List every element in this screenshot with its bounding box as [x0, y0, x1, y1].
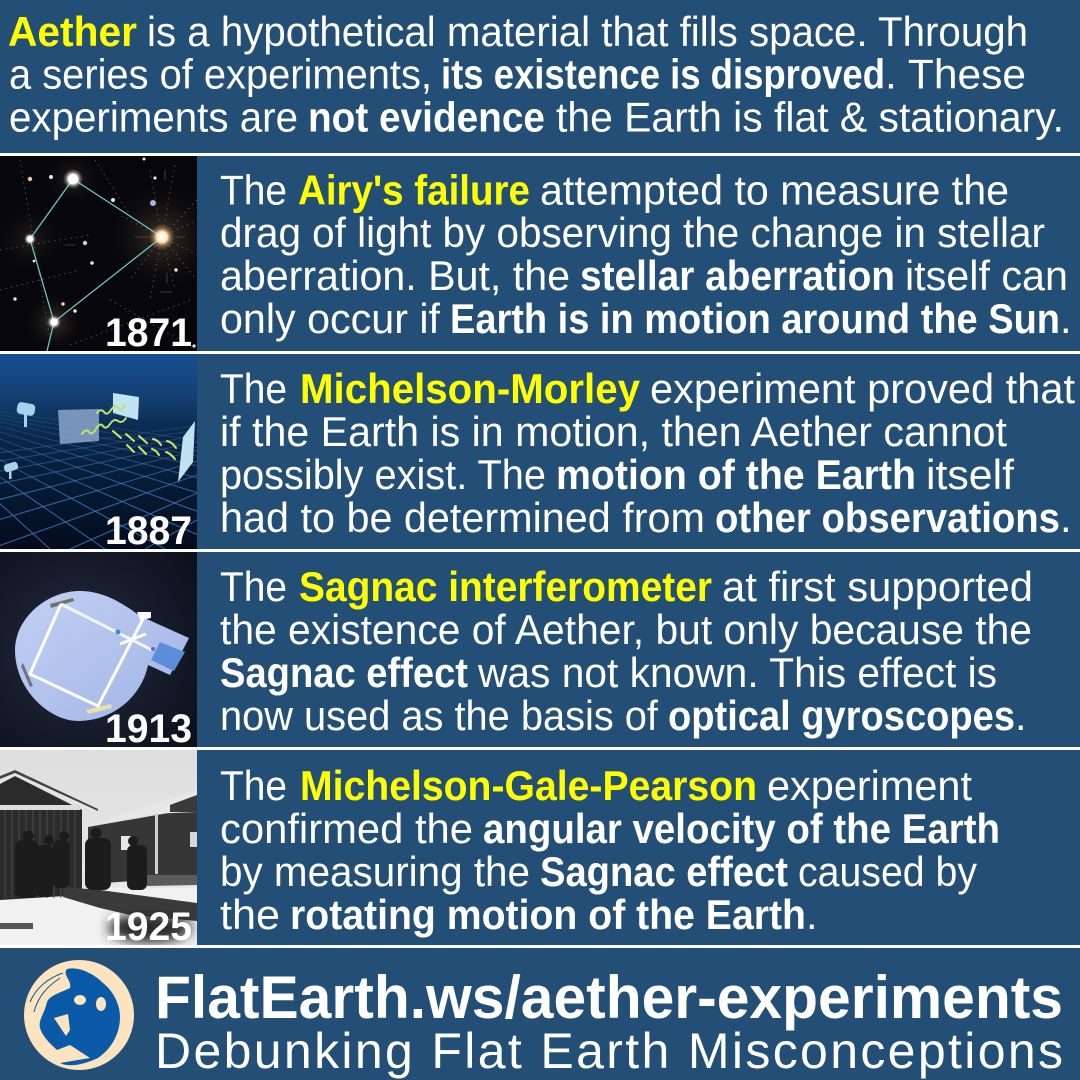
text: Michelson-Morley: .	[1060, 494, 1072, 541]
text: Sagnac interferometer: optical gyroscopes	[668, 692, 1015, 739]
text: Airy's failure: attempted to measure the	[540, 166, 1009, 214]
text: Sagnac interferometer	[220, 563, 1033, 739]
text: Airy's failure: itself can	[905, 252, 1068, 299]
text: Michelson-Gale-Pearson: angular velocity of the Earth	[483, 805, 1000, 852]
year label 1887: 1887	[105, 509, 192, 553]
year label 1871: 1871	[105, 311, 192, 355]
text: Michelson-Gale-Pearson: rotating motion of the Earth	[290, 891, 806, 938]
panel: Sagnac interferometer 1913	[0, 552, 1033, 751]
text: Michelson-Morley: itself	[926, 451, 1014, 498]
image: interferometer on grid	[0, 354, 197, 549]
text: Airy's failure: drag of light by observing the change in stellar	[220, 209, 1045, 256]
text: Sagnac interferometer: at first supported	[722, 563, 1033, 610]
intro text block: not evidence	[308, 94, 545, 140]
image: Sagnac interferometer disc	[0, 552, 197, 747]
panel: Michelson-Morley 1887	[0, 354, 1075, 553]
panel: Airy's failure 1871	[0, 149, 1072, 355]
text: Sagnac interferometer: Sagnac effect	[220, 649, 468, 696]
intro text block: experiments are	[9, 94, 298, 140]
intro text block: . These	[885, 50, 1026, 98]
laser waves	[82, 405, 176, 459]
intro text block: is a hypothetical material that fills space. Through	[147, 8, 1028, 55]
text: Michelson-Morley: The	[220, 365, 287, 412]
panel: Michelson-Gale-Pearson 1925	[0, 750, 1000, 949]
text: Michelson-Morley: if the Earth is in motion, then Aether cannot	[220, 408, 1007, 455]
text: Airy's failure: Airy's failure	[298, 166, 530, 214]
mirror panels	[58, 393, 195, 482]
image: star constellation	[0, 156, 197, 351]
intro text block: its existence is disproved	[441, 50, 885, 98]
light sources	[3, 402, 36, 479]
text: Michelson-Gale-Pearson: by measuring the	[220, 848, 530, 895]
text: Michelson-Gale-Pearson	[220, 762, 1000, 938]
text: Airy's failure: aberration. But, the	[220, 252, 570, 299]
text: Michelson-Morley: other observations	[715, 494, 1060, 541]
text: Michelson-Gale-Pearson: Michelson-Gale-Pearson	[300, 762, 757, 809]
intro text block: a series of experiments,	[9, 50, 432, 98]
text: Michelson-Gale-Pearson: Sagnac effect	[540, 848, 788, 895]
text: Michelson-Gale-Pearson: The	[220, 762, 287, 809]
text: Sagnac interferometer: .	[1015, 692, 1027, 739]
text: Michelson-Morley: possibly exist. The	[220, 451, 546, 498]
text: Airy's failure	[220, 166, 1072, 342]
text: Sagnac interferometer: the existence of Aether, but only because the	[220, 606, 1032, 653]
text: Airy's failure: stellar aberration	[580, 252, 895, 299]
text: Airy's failure: The	[220, 166, 287, 214]
text: Michelson-Gale-Pearson: caused by	[798, 848, 977, 895]
text: Michelson-Gale-Pearson: confirmed the	[220, 805, 473, 852]
image: historic photo of barns and men	[0, 750, 197, 945]
text: Michelson-Morley	[220, 365, 1075, 541]
icon: flat earth globe logo	[24, 960, 134, 1070]
footer	[24, 960, 1063, 1079]
text: Sagnac interferometer: now used as the basis of	[220, 692, 658, 739]
text: Michelson-Morley: motion of the Earth	[556, 451, 916, 498]
intro text block: Aether	[8, 8, 137, 55]
text: Airy's failure: .	[1060, 295, 1072, 342]
website address: FlatEarth.ws/aether-experiments	[155, 964, 1063, 1031]
text: Sagnac interferometer: The	[220, 563, 287, 610]
text: Michelson-Morley: had to be determined from	[220, 494, 705, 541]
text: Airy's failure: only occur if	[220, 295, 440, 342]
tagline: Debunking Flat Earth Misconceptions	[155, 1023, 1063, 1079]
text: Michelson-Morley: Michelson-Morley	[300, 365, 640, 412]
text: Michelson-Gale-Pearson: the	[220, 891, 280, 938]
intro text block	[8, 8, 1064, 140]
text: Michelson-Morley: experiment proved that	[650, 365, 1075, 412]
year label 1925: 1925	[105, 905, 192, 949]
text: Sagnac interferometer: Sagnac interferometer	[299, 563, 712, 610]
year label 1913: 1913	[105, 707, 192, 751]
intro text block: the Earth is flat & stationary.	[556, 94, 1064, 140]
text: Michelson-Gale-Pearson: .	[806, 891, 818, 938]
text: Sagnac interferometer: was not known. This effect is	[477, 649, 997, 696]
text: Michelson-Gale-Pearson: experiment	[767, 762, 972, 809]
